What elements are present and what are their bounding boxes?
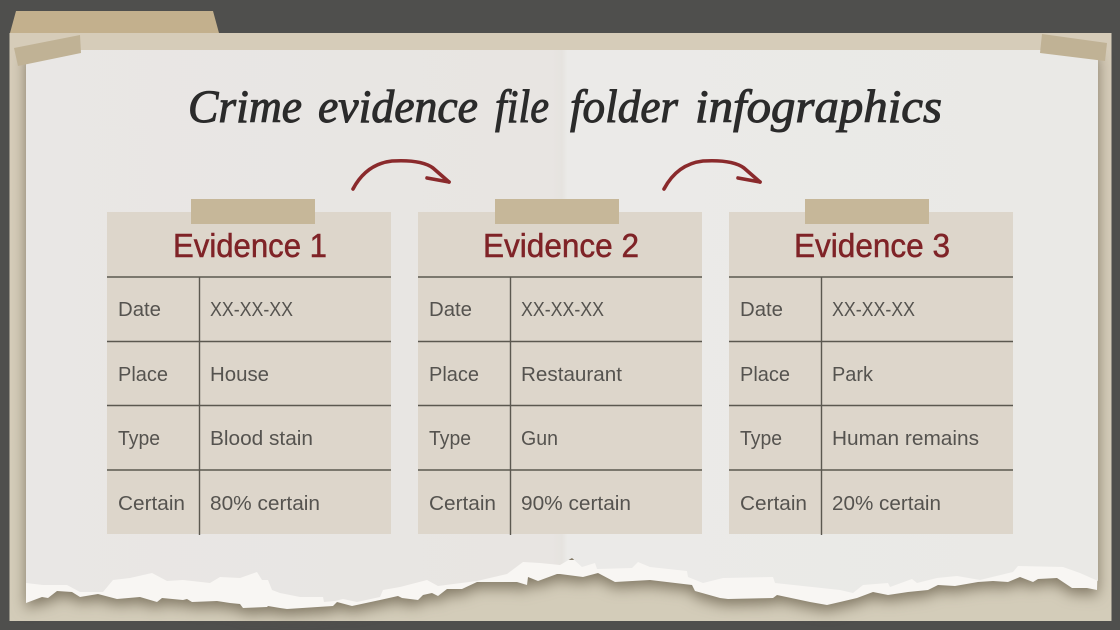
- arrow: evidence 1 to evidence 2: [353, 161, 449, 189]
- heading: Evidence 3: [794, 227, 950, 264]
- panel: evidence 1: [107, 199, 391, 535]
- table text: XX-XX-XX: [832, 299, 915, 321]
- tape: [805, 199, 929, 224]
- table text: Date: [429, 299, 472, 321]
- table text: House: [210, 364, 269, 386]
- table text: Type: [740, 428, 782, 450]
- title: folder: [570, 81, 679, 133]
- table text: Certain: [429, 493, 496, 515]
- folder tab: [10, 11, 219, 33]
- arrow: evidence 2 to evidence 3: [664, 161, 760, 189]
- table text: Type: [118, 428, 160, 450]
- heading: Evidence 2: [483, 227, 639, 264]
- heading: Evidence 1: [173, 227, 327, 264]
- table text: 90% certain: [521, 493, 631, 515]
- table text: 80% certain: [210, 493, 320, 515]
- table text: [118, 299, 320, 515]
- table text: Certain: [740, 493, 807, 515]
- title: evidence: [318, 81, 478, 133]
- folder top strip: [10, 33, 1112, 50]
- title: Crime: [188, 81, 302, 133]
- card background: [107, 212, 391, 534]
- table text: Date: [740, 299, 783, 321]
- panel: evidence 2: [418, 199, 702, 535]
- table text: Place: [740, 364, 790, 386]
- table text: Blood stain: [210, 428, 313, 450]
- table text: XX-XX-XX: [521, 299, 604, 321]
- table text: Human remains: [832, 428, 979, 450]
- tape: [191, 199, 315, 224]
- white torn strip: [26, 560, 1098, 609]
- tape: [495, 199, 619, 224]
- table text: [740, 299, 979, 515]
- tape: top left: [14, 35, 81, 66]
- panel: evidence 3: [729, 199, 1013, 535]
- table lines: [418, 277, 702, 535]
- table text: Gun: [521, 428, 558, 450]
- table text: Type: [429, 428, 471, 450]
- title: [188, 81, 942, 133]
- table text: [429, 299, 631, 515]
- card background: [418, 212, 702, 534]
- title: file: [495, 81, 549, 133]
- table text: Date: [118, 299, 161, 321]
- table text: XX-XX-XX: [210, 299, 293, 321]
- table text: Place: [429, 364, 479, 386]
- table text: Place: [118, 364, 168, 386]
- table lines: [107, 277, 391, 535]
- table text: 20% certain: [832, 493, 941, 515]
- table text: Certain: [118, 493, 185, 515]
- table text: Restaurant: [521, 364, 622, 386]
- card background: [729, 212, 1013, 534]
- title: infographics: [695, 81, 942, 133]
- table lines: [729, 277, 1013, 535]
- table text: Park: [832, 364, 874, 386]
- tape: top right: [1040, 34, 1107, 61]
